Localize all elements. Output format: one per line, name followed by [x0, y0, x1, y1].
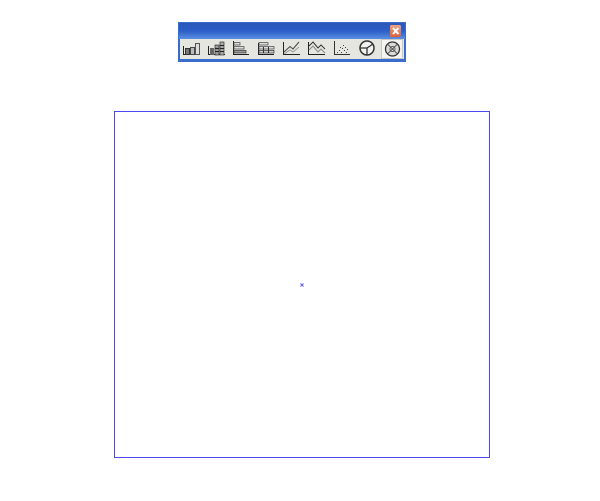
- icon: bar chart: [184, 44, 200, 54]
- icon: line chart: [284, 42, 300, 54]
- close button: [390, 25, 401, 37]
- icon: stacked bar chart: [208, 42, 225, 55]
- icon: scatter chart: [334, 41, 350, 54]
- toolbar icon tray: [180, 39, 404, 59]
- toolbar window: [178, 22, 406, 62]
- icon: horizontal bar chart: [234, 41, 249, 54]
- icon: area line chart: [308, 42, 325, 54]
- icon: stacked horizontal bar chart: [258, 42, 274, 54]
- empty plot frame: [114, 112, 490, 458]
- center point marker: [300, 284, 304, 286]
- toolbar title bar: [179, 23, 405, 39]
- icon: radar chart selected button: [382, 40, 402, 58]
- icon: pie chart: [360, 41, 374, 55]
